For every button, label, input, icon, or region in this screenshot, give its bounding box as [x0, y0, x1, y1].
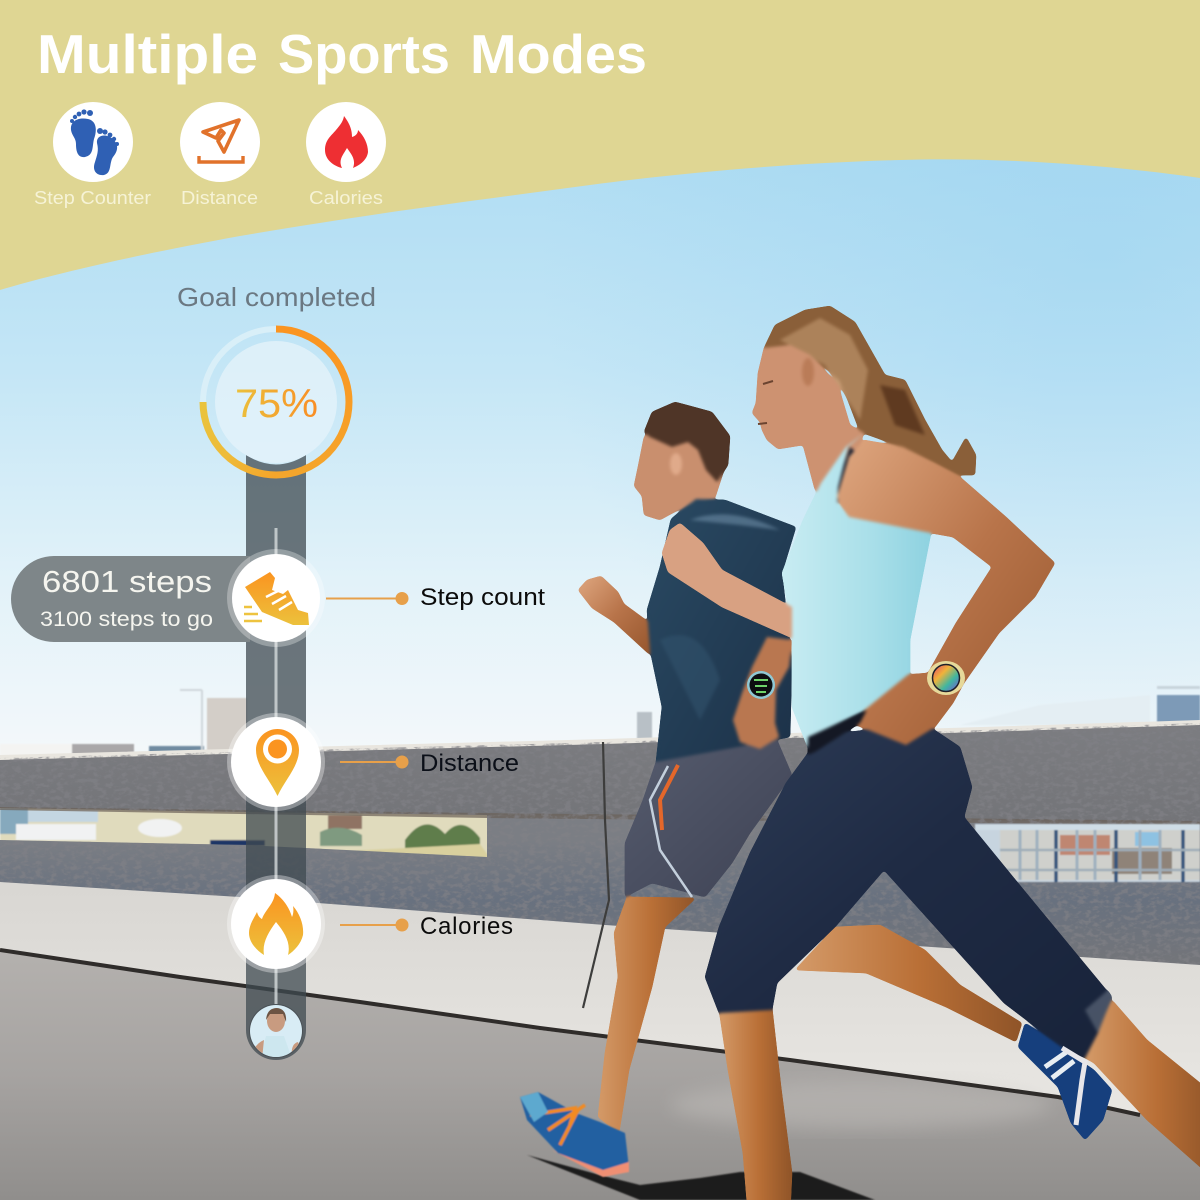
- top banner: [0, 0, 1200, 290]
- title: Modes: [470, 23, 647, 85]
- icon: location pin: [256, 729, 299, 796]
- distant skyline buildings: [0, 686, 1200, 758]
- goal progress ring: [203, 329, 349, 475]
- feature: distance: [180, 102, 260, 208]
- runner avatar: [249, 1004, 304, 1059]
- sock stripes and shoe edge: [1045, 1051, 1074, 1078]
- heading: goal completed: Goal completed: [177, 282, 376, 312]
- neck and head: [634, 420, 728, 520]
- road: [0, 950, 1200, 1200]
- icon: running shoe: [244, 572, 309, 625]
- rear lower leg: [1085, 1000, 1200, 1180]
- black band at waist: [808, 710, 867, 755]
- grey shorts: [625, 740, 792, 897]
- light concrete base: [0, 880, 1200, 1130]
- title: Multiple: [37, 23, 258, 85]
- scenery seen through wall gap: [0, 806, 490, 858]
- woman's smartwatch: [927, 661, 965, 695]
- man's smartwatch: [747, 671, 775, 699]
- far arm and fist: [578, 576, 650, 655]
- icon: footprints: [53, 102, 133, 182]
- man's blue running shoe: [520, 1092, 629, 1177]
- back arm: [837, 440, 1055, 745]
- front forearm and hand: [662, 523, 792, 638]
- male runner: [520, 402, 1022, 1177]
- hair and ponytail: [764, 306, 976, 475]
- distance node: [227, 713, 325, 811]
- calories node: [227, 875, 325, 973]
- kerb shadow line: [0, 950, 1140, 1115]
- callout: distance: Distance: [420, 750, 519, 777]
- shorts piping: [650, 766, 692, 897]
- feature: calories: [306, 102, 386, 208]
- label: distance: Distance: [181, 188, 258, 208]
- icon: red flame: [306, 102, 386, 182]
- label: step counter: Step Counter: [34, 188, 151, 208]
- percentage value: 75%: [235, 382, 318, 426]
- navy shirt: [647, 499, 796, 762]
- callout: step count: [326, 584, 545, 611]
- trailing leg: [795, 925, 1022, 1042]
- title: Sports: [278, 23, 450, 85]
- steps remaining: 3100 steps to go: [40, 608, 213, 631]
- steps value: 6801 steps: [42, 564, 212, 599]
- steps readout pill: [11, 556, 250, 642]
- callout: calories: [340, 913, 513, 940]
- rear sock and shoe: [1018, 1023, 1112, 1140]
- shadow of runners on road: [527, 1155, 875, 1200]
- feature: step counter: [34, 102, 151, 208]
- light blue tank top: [782, 433, 931, 748]
- callout: step count: Step count: [420, 584, 545, 611]
- label: calories: Calories: [309, 188, 383, 208]
- standing leg: [598, 897, 696, 1133]
- title: [37, 23, 647, 85]
- neck and face: [752, 345, 864, 503]
- callout: calories: Calories: [420, 913, 513, 940]
- tank strap shadow: [836, 447, 856, 517]
- icon: orange flame: [249, 893, 303, 955]
- front lower leg: [719, 1007, 792, 1200]
- woman's eye and lips: [758, 381, 773, 424]
- navy leggings: [705, 723, 1112, 1058]
- callout: distance: [340, 750, 519, 777]
- female runner: [662, 306, 1200, 1200]
- wrist and hand: [733, 637, 792, 749]
- concrete wall: [0, 723, 1200, 823]
- step count node: [227, 549, 325, 647]
- progress track bar: [246, 455, 306, 1060]
- wall joint crack: [583, 742, 609, 1008]
- right-side wall window grille: [975, 824, 1200, 882]
- icon: navigation arrow and tray: [180, 102, 260, 182]
